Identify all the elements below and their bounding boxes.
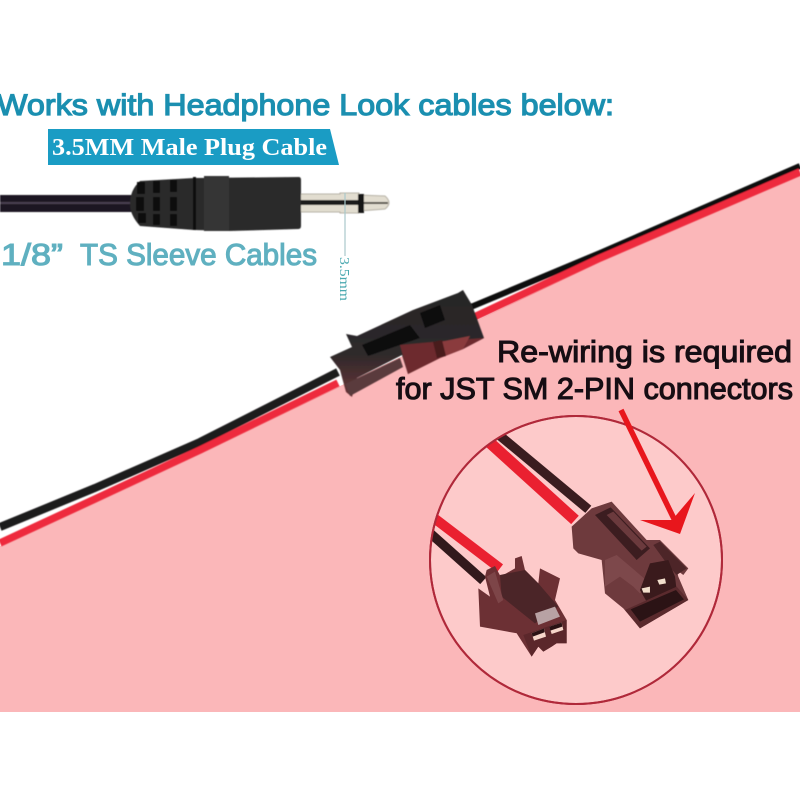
connector slots bbox=[362, 325, 420, 356]
plug body bbox=[130, 177, 301, 231]
plug metal bbox=[300, 193, 389, 213]
male connector bbox=[572, 502, 688, 628]
wires main bbox=[0, 166, 800, 543]
red arrow bbox=[621, 410, 695, 534]
black wire right bbox=[466, 166, 800, 309]
red wire left bbox=[0, 383, 338, 543]
banner: 3.5MM Male Plug Cable bbox=[48, 129, 339, 165]
main JST connector bbox=[330, 290, 484, 397]
left wires bbox=[427, 530, 483, 581]
inset circle outline bbox=[430, 416, 722, 704]
subheading: TS sleeve cables: 1/8” bbox=[1, 237, 63, 272]
callout text: re-wiring: for JST SM 2-PIN connectors bbox=[396, 371, 793, 406]
banner: 3.5MM Male Plug Cable: 3.5MM Male Plug Cable bbox=[52, 135, 327, 161]
cable bbox=[0, 195, 132, 212]
inset connectors and wires bbox=[427, 432, 688, 657]
audio plug cable bbox=[0, 176, 389, 231]
heading: compatibility: Works with Headphone Look cables below: bbox=[0, 89, 614, 122]
upper right wires bbox=[495, 432, 588, 509]
dimension label 3.5mm: 3.5mm bbox=[336, 257, 351, 301]
female connector bbox=[478, 556, 567, 657]
connector latch, red-brown bbox=[400, 338, 484, 374]
inset circle bbox=[430, 416, 722, 704]
infographic canvas bbox=[0, 92, 800, 712]
callout text: re-wiring bbox=[396, 334, 793, 406]
dimension line bbox=[344, 193, 346, 256]
callout text: re-wiring: Re-wiring is required bbox=[497, 334, 792, 369]
black wire left bbox=[0, 372, 338, 527]
subheading: TS sleeve cables: TS Sleeve Cables bbox=[80, 237, 317, 272]
red wire right bbox=[470, 172, 800, 319]
pink panel bbox=[0, 175, 800, 712]
